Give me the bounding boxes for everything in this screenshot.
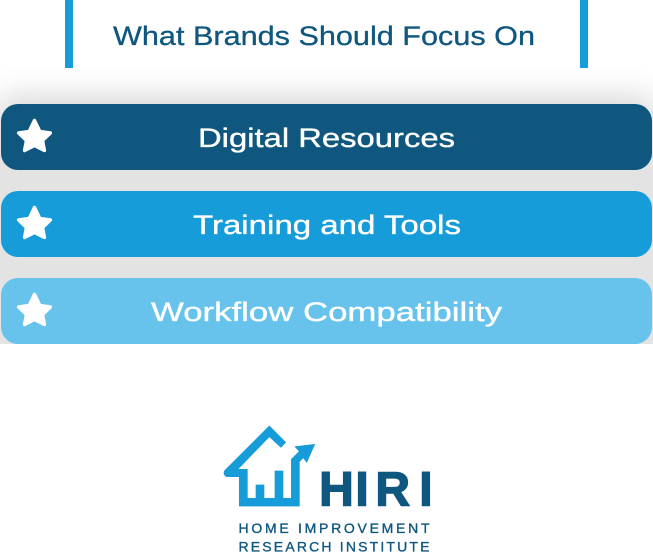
right title rule xyxy=(580,0,588,68)
icon: house with rising arrow xyxy=(224,426,315,506)
bar: Digital Resources xyxy=(1,104,652,170)
icon: star xyxy=(19,294,50,324)
panel: focus list xyxy=(0,84,653,344)
wordmark: HIRI: HIRI xyxy=(319,463,433,516)
left title rule xyxy=(65,0,73,68)
icon: star xyxy=(19,120,50,150)
label: Digital Resources: Digital Resources xyxy=(198,123,455,153)
wordmark: Home Improvement: HOME IMPROVEMENT xyxy=(238,520,430,536)
label: Training and Tools: Training and Tools xyxy=(193,210,461,240)
title: What Brands Should Focus On xyxy=(113,21,535,51)
bar: Training and Tools xyxy=(1,191,652,257)
logo: HIRI xyxy=(224,426,433,552)
icon: star xyxy=(19,208,50,238)
bar: Workflow Compatibility xyxy=(1,278,652,344)
label: Workflow Compatibility: Workflow Compatibility xyxy=(151,297,503,327)
